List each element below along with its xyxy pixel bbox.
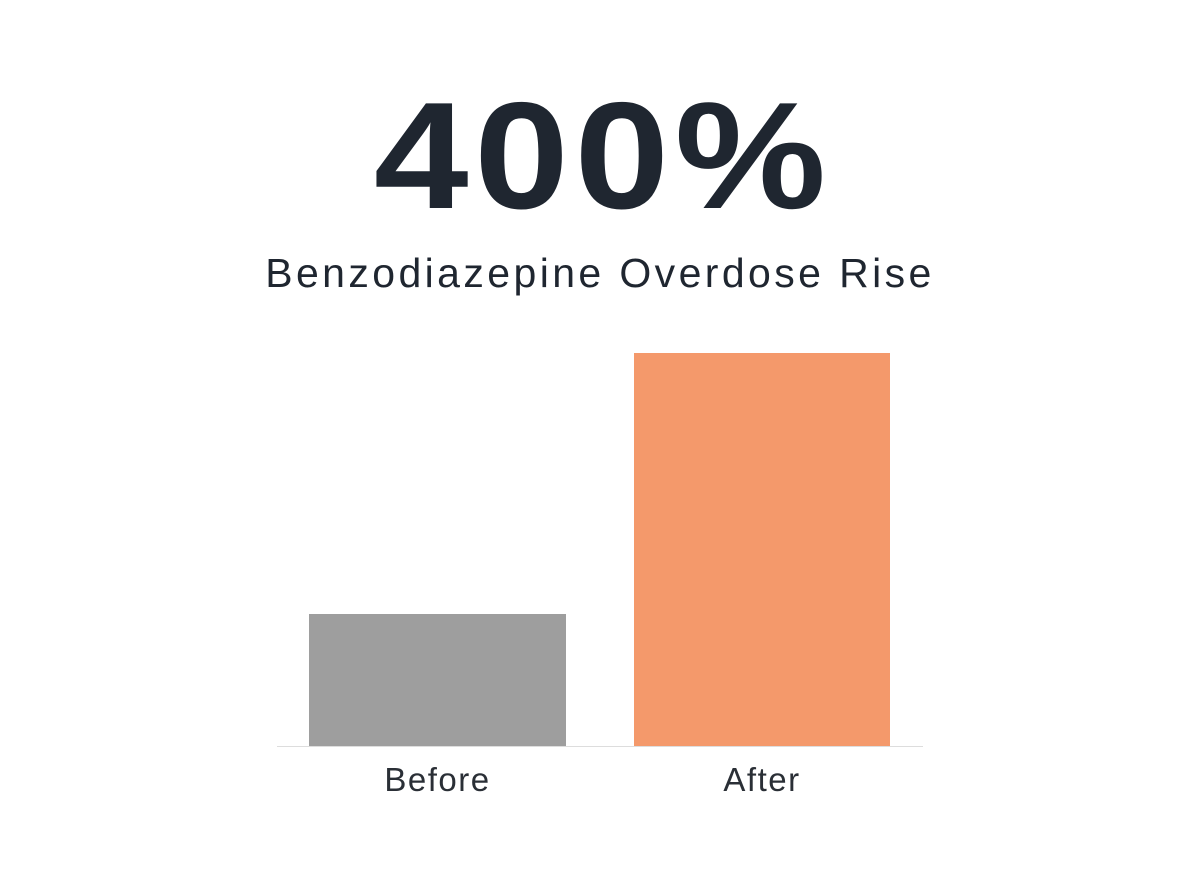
label: before: Before	[384, 761, 491, 798]
title: 400%: 400%	[374, 71, 832, 241]
bar chart	[277, 353, 923, 798]
label: after: After	[723, 761, 801, 798]
bar: before	[309, 614, 566, 746]
subtitle: Benzodiazepine Overdose Rise	[265, 250, 935, 296]
bar: after	[634, 353, 890, 746]
